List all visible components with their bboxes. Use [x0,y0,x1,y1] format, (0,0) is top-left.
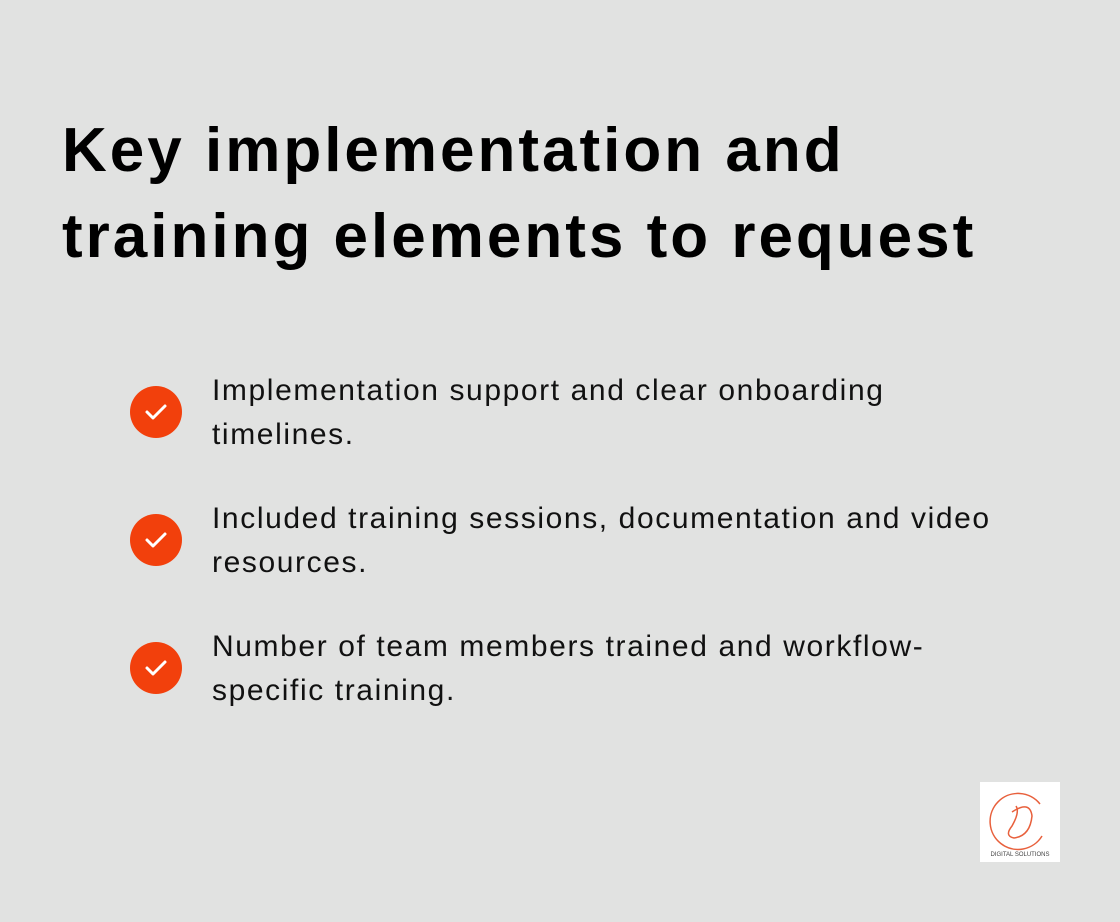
logo [980,782,1060,862]
logo: DIGITAL SOLUTIONS [990,852,1050,858]
title [62,116,976,271]
item 3 [130,630,924,707]
title: training elements to request [62,202,976,271]
item 2 [130,502,991,579]
text 2: Included training sessions, documentation and video resources. [212,502,991,579]
icon: check [130,386,182,438]
title: Key implementation and [62,116,845,185]
icon: check [130,514,182,566]
text 3: Number of team members trained and workflow-specific training. [212,630,924,707]
text 1: Implementation support and clear onboarding timelines. [212,374,885,451]
icon: check [130,642,182,694]
item 1 [130,374,885,451]
